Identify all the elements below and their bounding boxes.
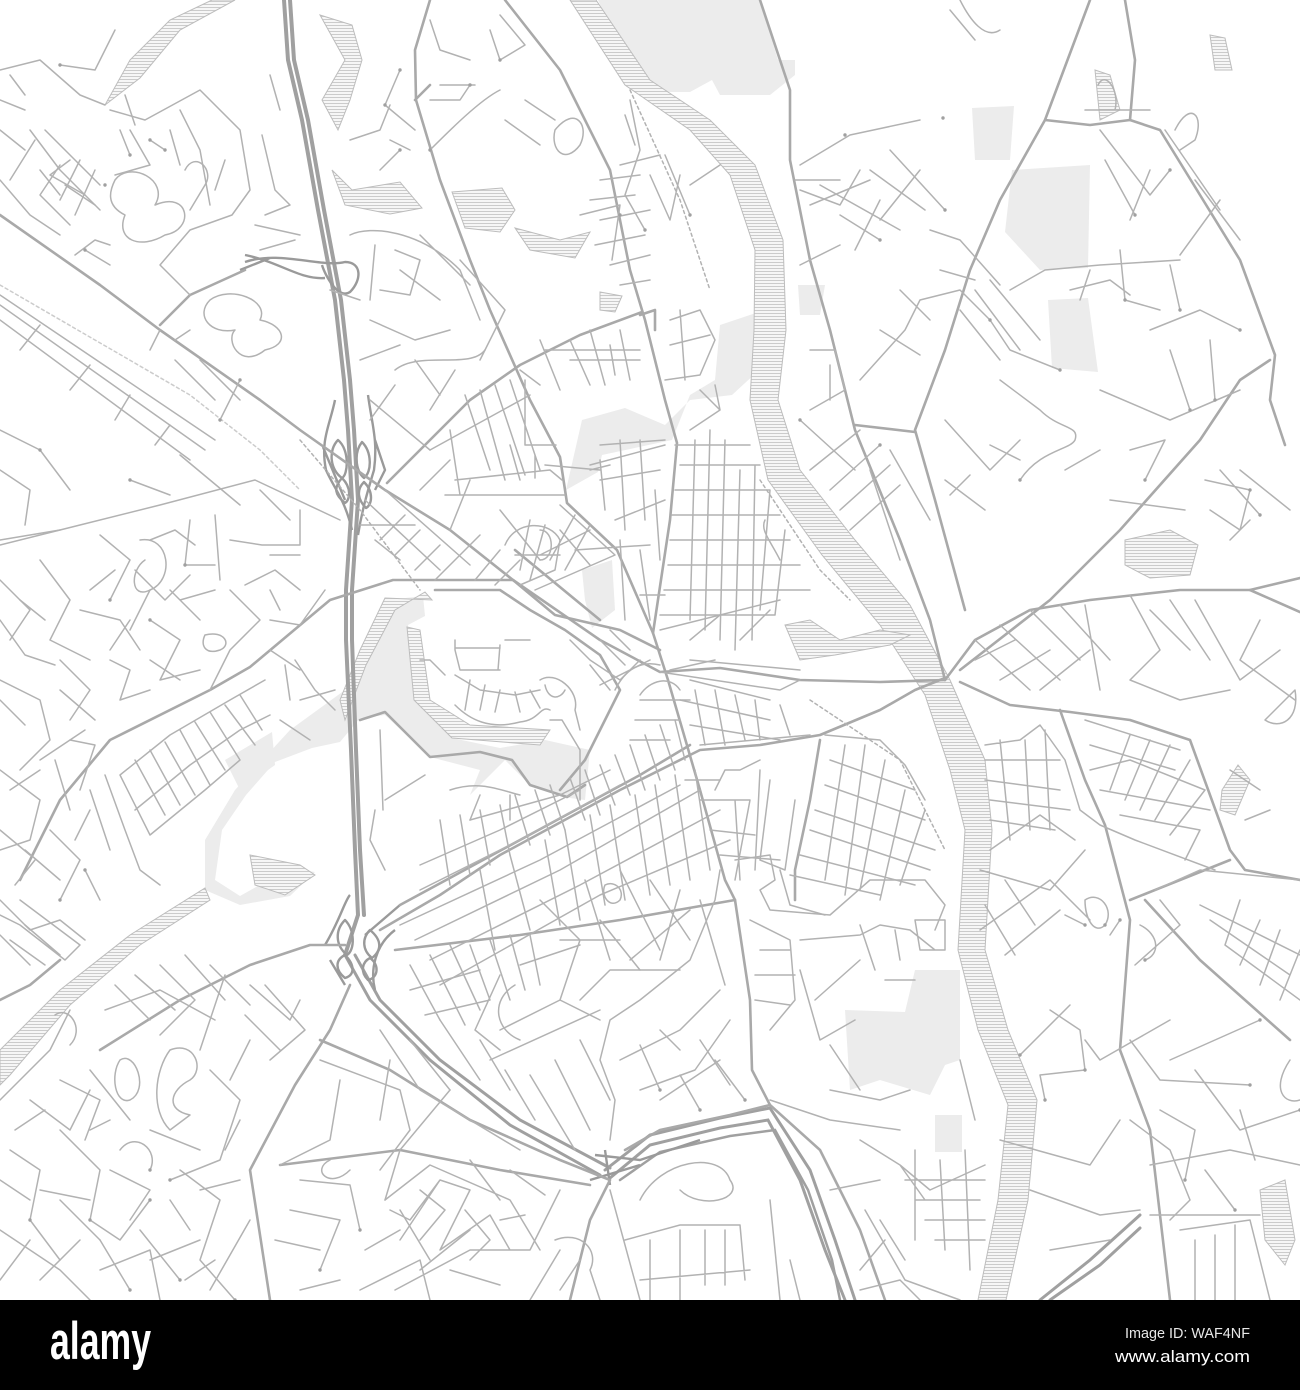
footer logo: alamy [50, 1312, 151, 1371]
map: interchanges [240, 255, 700, 1185]
footer logo: www.alamy.com [1114, 1347, 1250, 1366]
map: south creek and streets [380, 870, 745, 1150]
map: east-side streets [975, 595, 1300, 1300]
map: highways [284, 0, 1140, 1300]
map: north grid east of main road [660, 430, 810, 650]
map: southeast downtown grid [735, 735, 985, 1300]
map: loop south of the lake [370, 640, 580, 870]
map: grid west of main road north [360, 380, 665, 620]
map: northeast suburb streets [795, 0, 1290, 560]
map: NW neighbourhood streets [0, 30, 300, 420]
footer logo [50, 1312, 1250, 1371]
footer bar [0, 1300, 1300, 1390]
map: west grid near the lake [0, 680, 270, 965]
map: parks and green areas [205, 0, 1098, 1152]
map: southwest suburb streets [0, 955, 305, 1300]
map: dashed rail lines [300, 90, 945, 850]
map: south suburb streets [275, 1060, 920, 1300]
footer logo: Image ID: WAF4NF [1125, 1325, 1250, 1342]
map: downtown streets [400, 630, 810, 1050]
map: airport runways [0, 285, 300, 540]
map: western suburb streets [0, 480, 340, 940]
map: north-central streets [330, 15, 720, 450]
